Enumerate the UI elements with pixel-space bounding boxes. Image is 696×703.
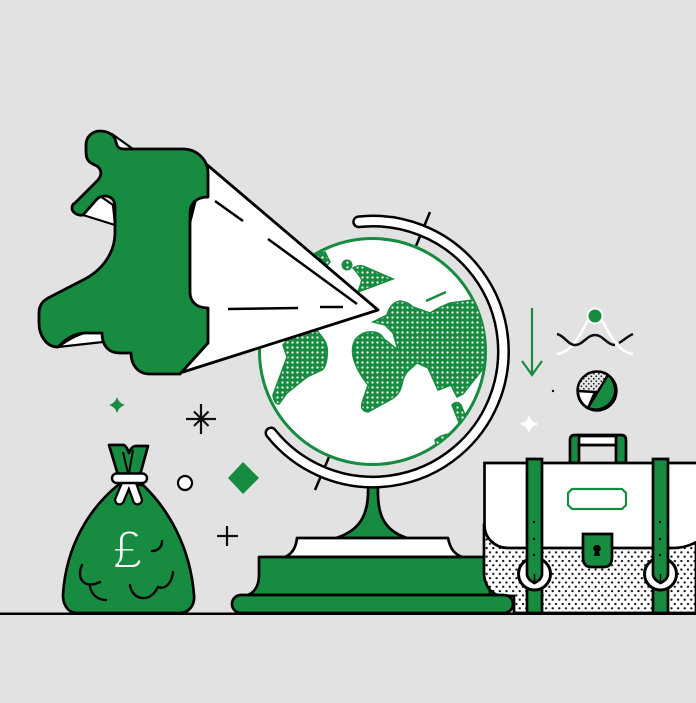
globe stand [248, 486, 490, 595]
stand pedestal [248, 557, 490, 595]
wales map [39, 131, 208, 374]
americas [273, 325, 327, 404]
arctic islet [342, 260, 352, 270]
cone body [170, 163, 378, 372]
cone dashes [215, 201, 357, 309]
bag ruffle folds [123, 450, 133, 473]
stand stem [336, 486, 407, 538]
bag creases [80, 541, 173, 600]
right lower strap [653, 585, 668, 613]
globe meridian arc [271, 221, 503, 482]
briefcase handle [570, 435, 626, 463]
strap tip lines [534, 574, 660, 582]
strap holes [533, 521, 661, 556]
icon: white sparkle [520, 416, 538, 432]
right buckle ring [644, 558, 676, 590]
illustration [0, 130, 696, 615]
icon: speck [552, 390, 554, 392]
briefcase flap [484, 463, 696, 548]
icon: down arrow [522, 308, 542, 375]
africa and asia [352, 300, 490, 412]
bag tie legs [120, 482, 138, 500]
left lower strap [527, 585, 542, 613]
briefcase body [484, 525, 696, 613]
pound sign: £ [112, 520, 143, 580]
southern island [452, 402, 467, 425]
pie base [578, 372, 616, 410]
pie chart icon [578, 372, 616, 410]
pie green slice [588, 375, 615, 410]
pedestal base [232, 595, 513, 613]
ground line [0, 612, 696, 615]
briefcase [484, 435, 696, 613]
globe [260, 212, 490, 490]
stand plinth [285, 538, 462, 557]
line chart icon [557, 308, 633, 354]
keyhole [593, 545, 601, 556]
clasp [583, 534, 612, 567]
globe highlight [426, 292, 446, 301]
northern island [315, 252, 330, 268]
icon: plus [217, 526, 238, 546]
right upper strap [653, 459, 668, 583]
chart marker [588, 308, 602, 324]
white bell curve [557, 314, 633, 354]
cone of Wales flag [39, 131, 378, 374]
globe sphere [260, 238, 486, 464]
handle white bar [579, 436, 616, 445]
greenland [353, 266, 393, 292]
small folds [58, 134, 133, 347]
left upper strap [527, 459, 542, 583]
left buckle ring [518, 558, 550, 590]
pie white slice [578, 391, 595, 408]
continents [273, 252, 490, 445]
money bag [63, 445, 194, 613]
icon: asterisk [186, 404, 216, 434]
bag ruffle [109, 445, 148, 475]
icon: green diamond [228, 462, 259, 494]
bag tie [112, 474, 147, 483]
globe axis ticks [315, 212, 430, 490]
southern coast [435, 434, 449, 445]
nameplate [568, 489, 626, 509]
icon: green sparkle [109, 397, 125, 413]
black wave [557, 334, 633, 345]
icon: small circle [178, 476, 192, 490]
bag body [63, 485, 194, 613]
